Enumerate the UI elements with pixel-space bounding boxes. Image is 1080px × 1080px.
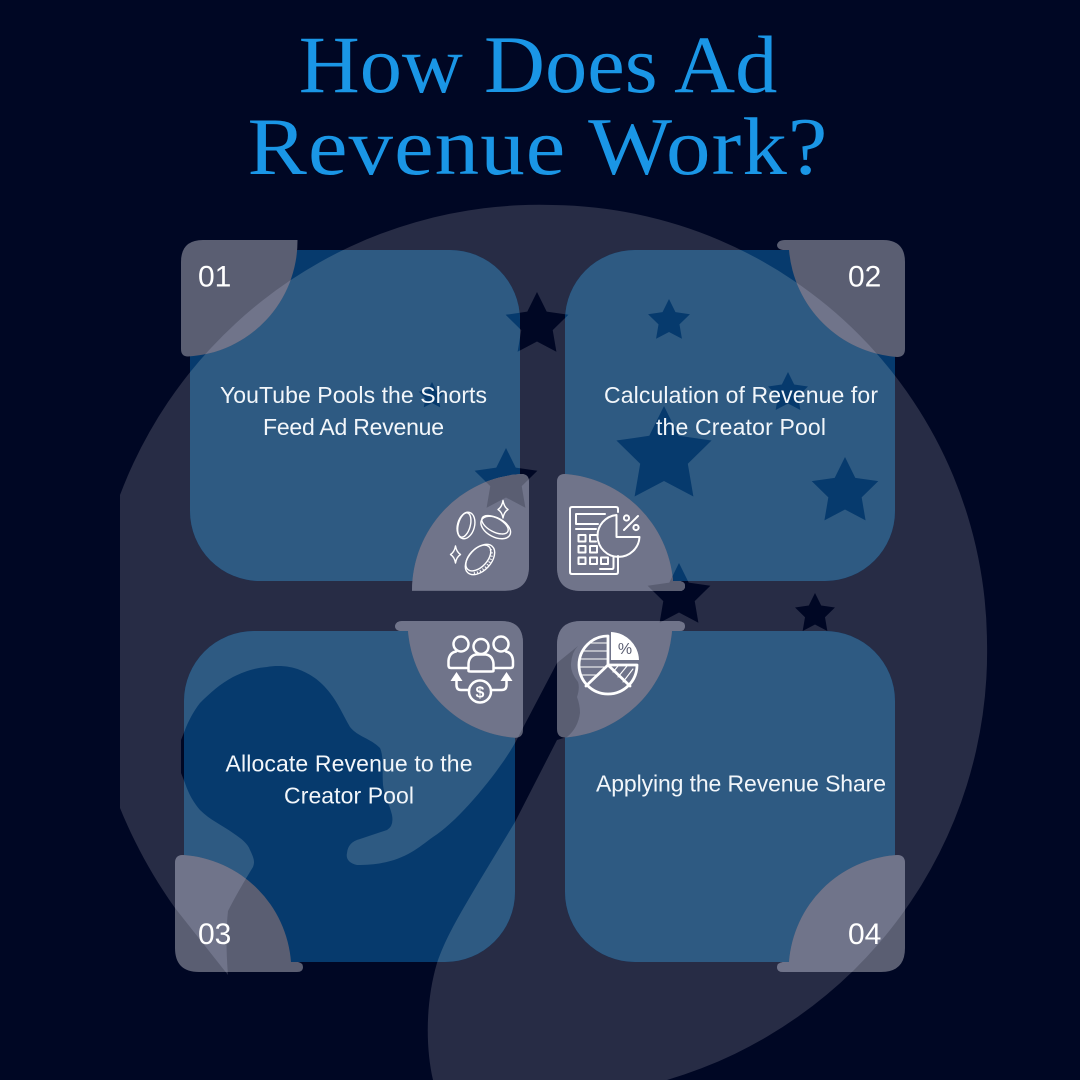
text: step 02 description: Calculation of Revenue for [604, 382, 878, 408]
text: step 03 description: Creator Pool [284, 782, 414, 808]
number tab: 01: 01 [198, 260, 231, 294]
number tab: 04 [777, 855, 905, 972]
icon: pie chart with percent wedge: % [618, 641, 632, 658]
card: step 01 with text [190, 250, 520, 581]
icon: calculator with pie chart and percent [570, 507, 640, 574]
icon: three people sharing money [448, 636, 513, 702]
title: Revenue Work? [248, 101, 828, 192]
text: step 01 description: Feed Ad Revenue [263, 414, 444, 440]
title [248, 19, 828, 192]
icon: arrow heads [450, 672, 512, 681]
number tab: 03 [175, 855, 303, 972]
panel: step 04 applying the revenue share [557, 621, 905, 972]
panel: step 01 YouTube pools the ad revenue [181, 240, 529, 591]
card: step 04 with text [565, 631, 895, 962]
text: step 02 description: the Creator Pool [656, 414, 826, 440]
panel: step 03 allocate revenue [175, 621, 523, 972]
number tab: 02 [777, 240, 905, 357]
card: step 03 with text [184, 631, 515, 962]
number tab: 01 [181, 240, 298, 356]
icon tab: calculator [557, 474, 685, 591]
number tab: 02: 02 [848, 260, 881, 294]
icon tab: coins [412, 474, 529, 591]
title: How Does Ad [299, 19, 777, 110]
icon: coins and sparkles [450, 500, 514, 580]
number tab: 03: 03 [198, 918, 231, 951]
icon tab: group with money [395, 621, 523, 738]
card: step 02 with text [565, 250, 895, 581]
text: step 01 description: YouTube Pools the Shorts [220, 382, 487, 408]
text: step 04 description: Applying the Revenue Share [596, 770, 886, 796]
icon tab: pie chart [557, 621, 685, 738]
text: step 03 description: Allocate Revenue to the [226, 750, 472, 776]
panel: step 02 calculation of revenue [557, 240, 905, 591]
icon: dollar sign: $ [476, 684, 485, 702]
number tab: 04: 04 [848, 918, 881, 951]
